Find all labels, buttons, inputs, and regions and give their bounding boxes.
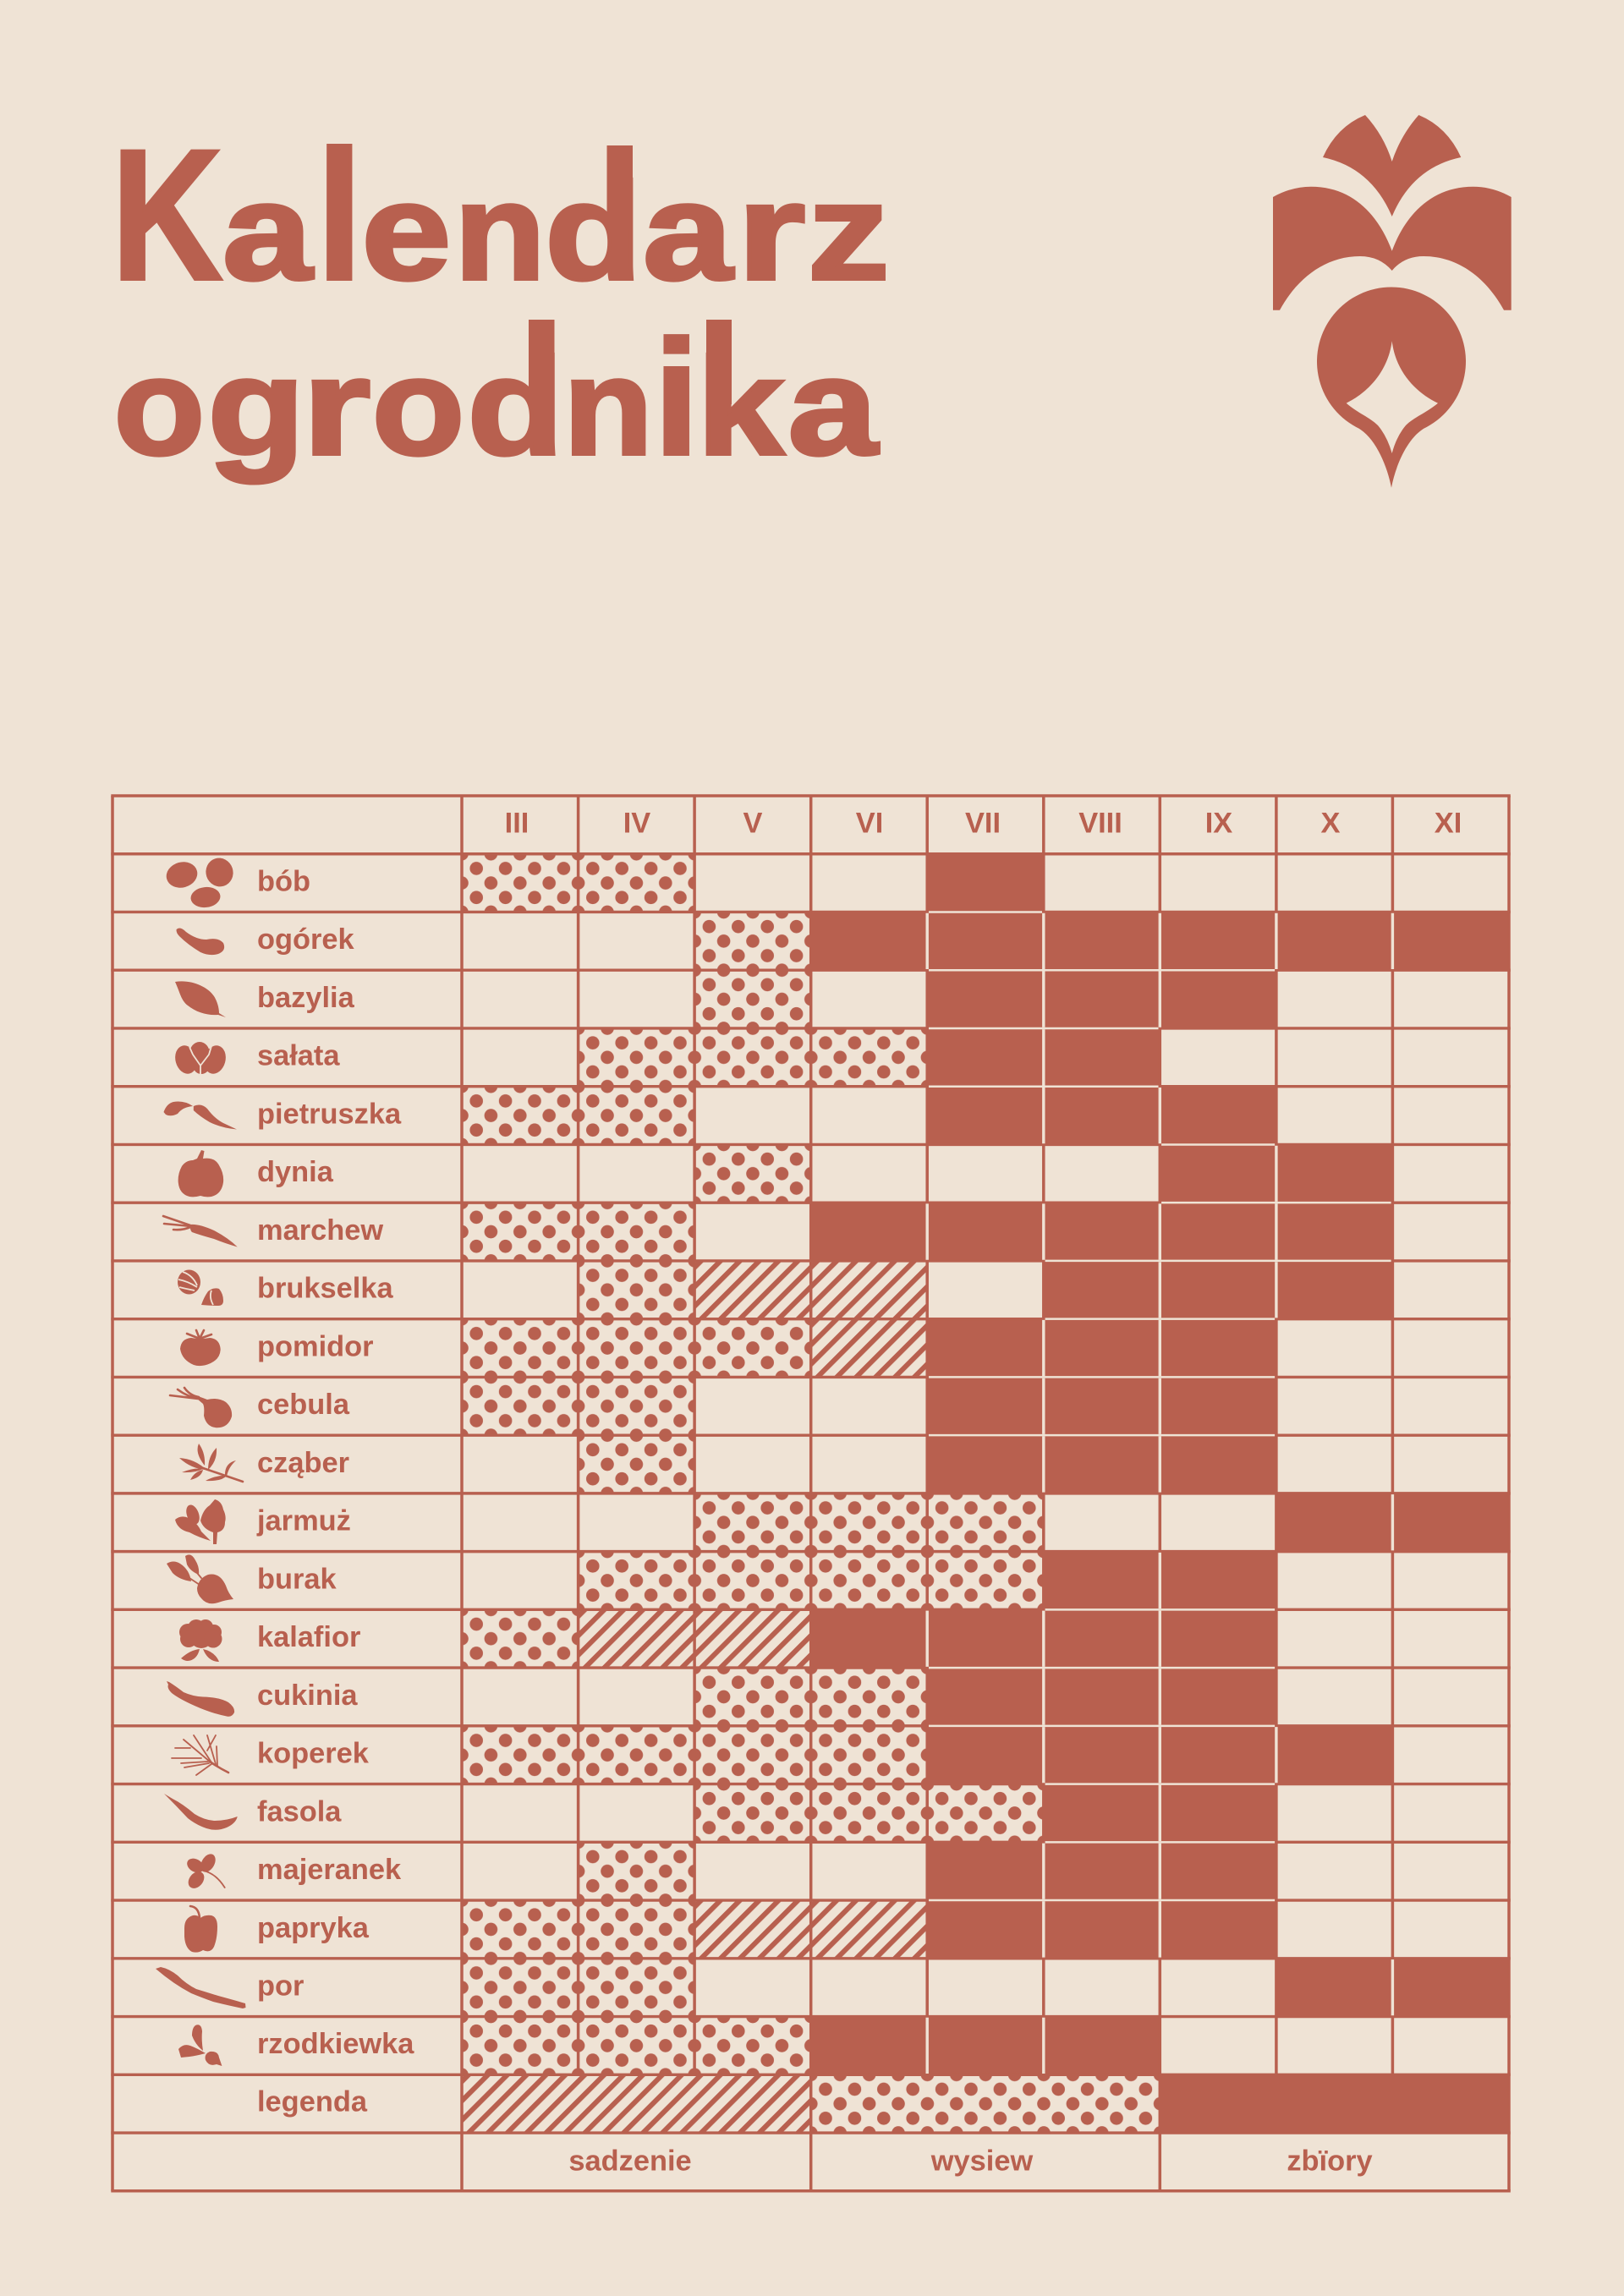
row: fasola: fasola (257, 1795, 342, 1827)
row: marchew (163, 1203, 1392, 1261)
title: e (361, 154, 451, 309)
row: legend captions: sadzenie (568, 2145, 692, 2178)
icon: onion (170, 1388, 232, 1427)
row: cukinia (167, 1668, 1276, 1726)
title: d (545, 154, 642, 309)
icon: lettuce (173, 1042, 228, 1077)
row: cukinia: cukinia (257, 1680, 358, 1712)
row: months header: V (743, 808, 763, 840)
title: a (643, 154, 734, 309)
row: bób (163, 854, 1044, 912)
row: marchew: marchew (257, 1214, 383, 1247)
row: months header (505, 808, 1462, 840)
row: majeranek: majeranek (257, 1854, 402, 1886)
row: months header: IV (623, 808, 650, 840)
title: r (737, 154, 805, 309)
icon: dill (172, 1735, 228, 1775)
row: legend swatches: legenda (257, 2085, 368, 2118)
title: a (222, 154, 314, 309)
title: o (372, 329, 464, 484)
row: months header: III (505, 808, 529, 840)
row: cebula (170, 1377, 1276, 1435)
row: papryka: papryka (257, 1912, 370, 1944)
row: months header: X (1321, 808, 1341, 840)
row: bazylia (175, 970, 1276, 1028)
title: a (788, 329, 879, 484)
row: ogórek: ogórek (257, 923, 355, 956)
title: z (808, 154, 890, 309)
row: months header: VI (856, 808, 883, 840)
row: cebula: cebula (257, 1389, 350, 1421)
row: jarmuż: jarmuż (256, 1505, 351, 1537)
row: pietruszka: pietruszka (257, 1098, 402, 1130)
icon: cauliflower (179, 1619, 222, 1662)
icon: kale (175, 1499, 226, 1544)
row: months header: VII (965, 808, 1001, 840)
row: brukselka: brukselka (257, 1273, 393, 1305)
row: burak: burak (257, 1563, 337, 1595)
title: i (654, 306, 700, 489)
icon: zucchini (167, 1681, 234, 1717)
icon: bell pepper (184, 1906, 217, 1953)
icon: brussels sprouts (178, 1270, 223, 1306)
row: pomidor (180, 1319, 1276, 1377)
row: fasola (164, 1784, 1276, 1842)
row: months header: VIII (1078, 808, 1122, 840)
row: cząber (179, 1435, 1276, 1493)
row: rzodkiewka: rzodkiewka (257, 2028, 414, 2060)
title: k (697, 329, 784, 484)
icon: broad beans (163, 854, 237, 909)
icon: leek (156, 1967, 245, 2008)
row: cząber: cząber (257, 1447, 349, 1479)
icon: bean pod (164, 1794, 238, 1830)
title: K (112, 111, 222, 319)
title (112, 111, 890, 489)
row: pietruszka (164, 1087, 1276, 1144)
icon: carrot (163, 1216, 238, 1247)
row: kalafior: kalafior (257, 1621, 360, 1653)
row: brukselka (178, 1261, 1392, 1319)
title: r (302, 329, 370, 484)
row: bób: bób (257, 865, 310, 897)
row: dynia: dynia (257, 1156, 334, 1188)
icon: parsley root (164, 1102, 237, 1130)
row: months header: IX (1205, 808, 1232, 840)
title: n (563, 329, 653, 484)
logo: radish emblem (1273, 115, 1512, 488)
row: legend captions: zbïory (1287, 2145, 1373, 2178)
row: kalafior (179, 1609, 1276, 1668)
row: koperek: koperek (257, 1737, 370, 1769)
icon: marjoram (184, 1851, 225, 1892)
row: legend captions: wysiew (930, 2145, 1033, 2178)
icon: radish (178, 2025, 222, 2066)
row: months header: XI (1435, 808, 1462, 840)
row: dynia (178, 1144, 1393, 1203)
icon: cucumber (177, 929, 224, 955)
row: jarmuż (175, 1493, 1509, 1552)
row: legend swatches (257, 2074, 1509, 2133)
row: majeranek (184, 1842, 1276, 1900)
icon: tomato (180, 1330, 221, 1366)
row: por (156, 1959, 1509, 2017)
title: d (467, 329, 563, 484)
row: legend captions (568, 2145, 1373, 2178)
row: burak (167, 1552, 1276, 1609)
row: bazylia: bazylia (257, 982, 355, 1014)
row: sałata: sałata (257, 1040, 340, 1072)
row: rzodkiewka (178, 2017, 1160, 2074)
row: papryka (184, 1900, 1276, 1959)
row: por: por (257, 1970, 304, 2003)
title: l (316, 113, 362, 319)
row: koperek (172, 1726, 1392, 1784)
row: ogórek (177, 912, 1509, 970)
row: pomidor: pomidor (257, 1330, 374, 1362)
title: o (113, 329, 205, 484)
icon: savory sprig (179, 1444, 243, 1482)
title: n (454, 154, 546, 309)
icon: beetroot (167, 1554, 233, 1603)
icon: pumpkin (178, 1150, 223, 1197)
icon: basil leaf (175, 981, 226, 1017)
row: sałata (173, 1028, 1160, 1087)
title: g (208, 329, 304, 484)
table: calendar rows (156, 808, 1509, 2178)
